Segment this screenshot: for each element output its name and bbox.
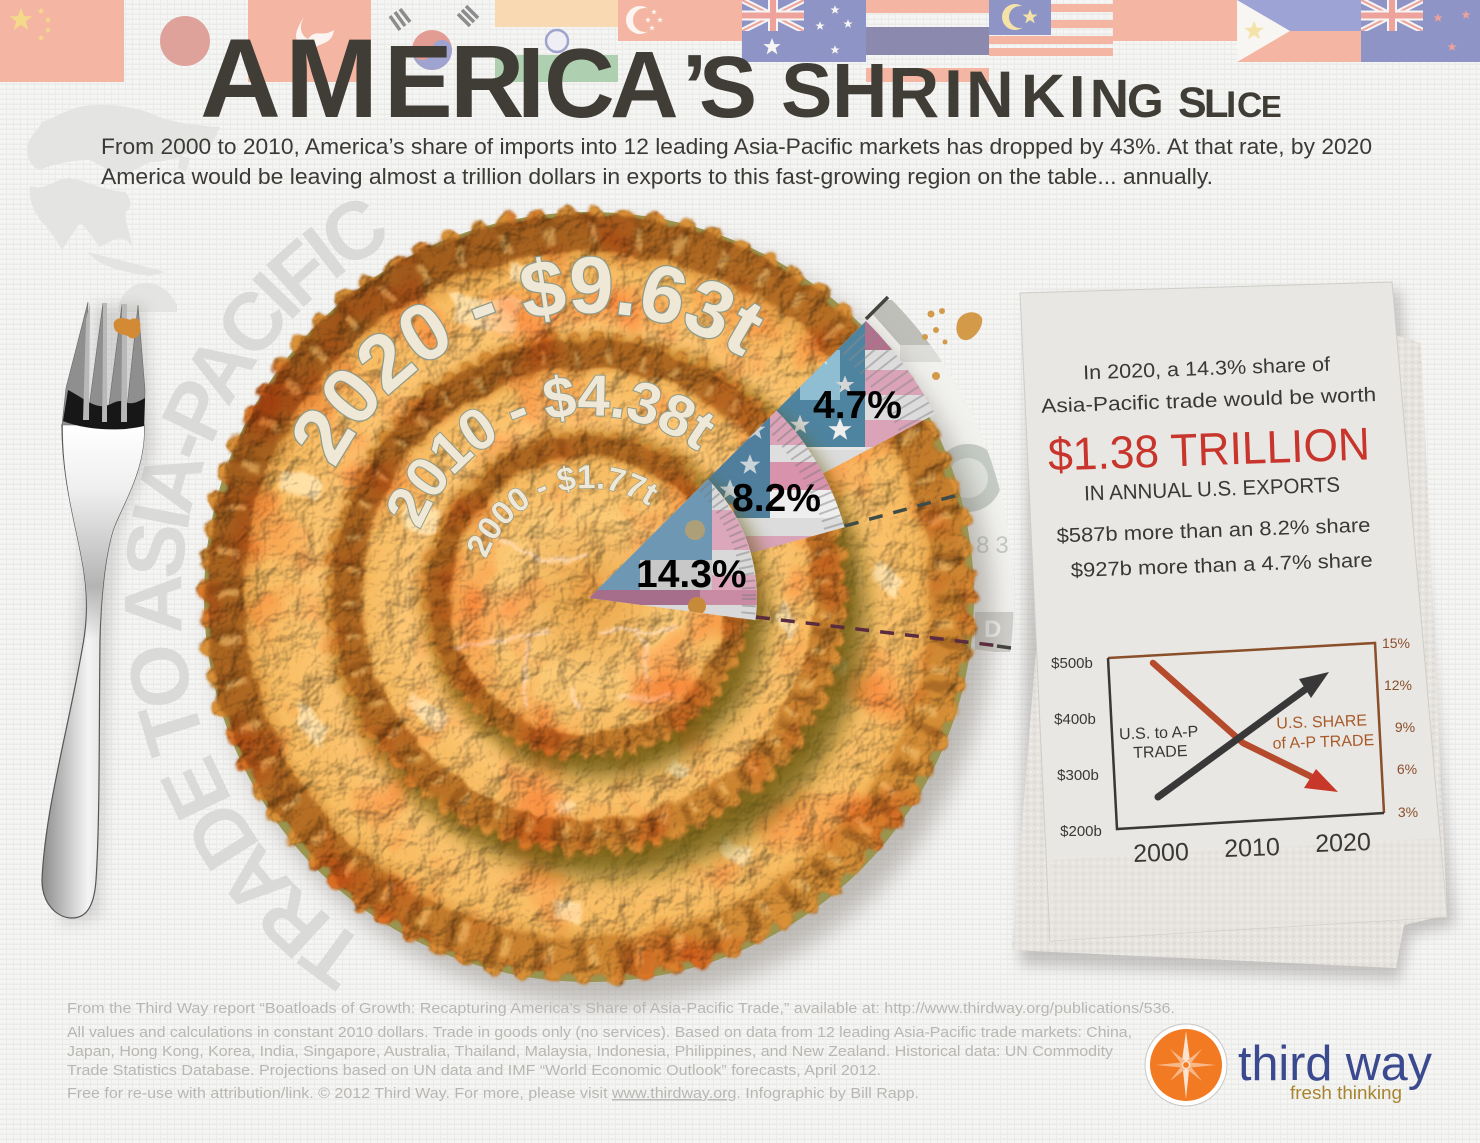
- year labels: 2000: [1133, 838, 1189, 868]
- left axis labels: $200b: [1060, 823, 1102, 840]
- right axis labels: 6%: [1397, 761, 1417, 777]
- logo wordmark: third way: [1238, 1037, 1432, 1091]
- title: A: [200, 16, 281, 141]
- left axis labels: $500b: [1051, 655, 1093, 672]
- flag: Philippines: [1237, 0, 1361, 62]
- pie tray edge: [204, 212, 974, 982]
- napkin: [1012, 282, 1455, 980]
- pie label: 2000: 2000 - $1.77t: [467, 464, 658, 559]
- pie label: 2010: 2010 - $4.38t: [387, 373, 716, 530]
- chart frame: [1108, 643, 1384, 829]
- pie tier shadow: 2010: [343, 354, 867, 878]
- flag: Australia: [742, 0, 866, 62]
- flag: New Zealand: [1361, 0, 1480, 62]
- fork: [42, 302, 155, 925]
- title: L: [1204, 82, 1228, 126]
- logo tagline: fresh thinking: [1290, 1083, 1402, 1103]
- right axis labels: [1382, 635, 1418, 820]
- flag: Malaysia: [989, 0, 1113, 56]
- napkin headline: Asia-Pacific trade would be worth: [1041, 384, 1377, 418]
- red share line: [1153, 663, 1338, 792]
- napkin embossed border: [1050, 838, 1447, 941]
- title: S: [781, 48, 832, 134]
- right axis labels: 9%: [1395, 719, 1415, 735]
- pie tier: 2000: [428, 435, 748, 755]
- title: K: [1021, 62, 1065, 130]
- footer source text: [67, 1000, 1175, 1102]
- line label: share: [1272, 712, 1375, 753]
- pie shadow: [216, 228, 992, 1004]
- footer source text: Japan, Hong Kong, Korea, India, Singapore, Australia, Thailand, Malaysia, Indonesia, Philippines, and New Zealand. Historical data: UN Commodity: [67, 1043, 1114, 1060]
- napkin headline: In 2020, a 14.3% share of: [1083, 354, 1331, 384]
- flag: Indonesia: [1113, 0, 1237, 41]
- title: I: [1226, 84, 1236, 125]
- napkin line chart: [1051, 635, 1418, 868]
- world map ghost: [27, 105, 220, 312]
- pie tier: 2010: [332, 339, 842, 849]
- flag foil slice: 4.7%: [774, 321, 934, 474]
- logo compass: [1145, 1024, 1227, 1106]
- napkin back layer: [1012, 335, 1447, 968]
- flag: Thailand: [866, 0, 989, 82]
- title: S: [699, 39, 757, 136]
- black trade line: [1158, 672, 1329, 797]
- pie tier shadow: 2000: [436, 446, 768, 778]
- title: M: [285, 16, 378, 141]
- title: R: [450, 24, 524, 139]
- dollar bill behind pie: [873, 300, 1014, 652]
- fork body: [42, 425, 144, 918]
- fork tine slots: [83, 303, 127, 422]
- pie tier: 2020: [207, 215, 967, 975]
- dollar bill behind pie: 83: [976, 532, 1015, 559]
- title: N: [966, 57, 1014, 131]
- title: I: [944, 56, 963, 132]
- napkin comparison lines: $587b more than an 8.2% share: [1056, 515, 1371, 547]
- footer source text: From the Third Way report “Boatloads of Growth: Recapturing America’s Share of Asia-Pacific Trade,” available at: http://www.thirdway.org/publications/536.: [67, 1000, 1175, 1017]
- left axis labels: $300b: [1057, 767, 1099, 784]
- title: H: [832, 48, 888, 134]
- flag: China: [0, 0, 124, 82]
- intro text: From 2000 to 2010, America’s share of imports into 12 leading Asia-Pacific markets has dropped by 43%. At that rate, by 2020: [101, 134, 1372, 159]
- left axis labels: [1051, 655, 1102, 840]
- line label: trade: U.S. to A-P: [1119, 724, 1199, 743]
- napkin comparison lines: [1056, 515, 1373, 582]
- napkin headline: [1040, 352, 1377, 418]
- title: ’: [682, 37, 707, 137]
- title: I: [517, 27, 545, 139]
- flag: Singapore: [618, 0, 742, 41]
- title: N: [1090, 69, 1129, 129]
- line label: share: of A-P TRADE: [1272, 732, 1375, 753]
- intro text: America would be leaving almost a trillion dollars in exports to this fast-growing region on the table... annually.: [101, 164, 1213, 189]
- title: E: [1261, 89, 1282, 124]
- right axis labels: 3%: [1398, 804, 1418, 820]
- slice label: 8.2%: 8.2%: [732, 477, 821, 520]
- napkin front layer: [1020, 282, 1447, 941]
- napkin comparison lines: $927b more than a 4.7% share: [1070, 549, 1373, 582]
- slice label: 4.7%: 4.7%: [813, 384, 902, 427]
- flag foil slice: 14.3%: [589, 479, 757, 620]
- title: E: [384, 24, 453, 139]
- flag: South Korea: [390, 6, 478, 74]
- flag: Japan: [160, 16, 210, 66]
- slice label: 14.3%: 14.3%: [636, 553, 747, 596]
- napkin big figure: $1.38 TRILLION: [1047, 417, 1371, 481]
- title: G: [1127, 74, 1164, 127]
- flag: India: [495, 0, 618, 82]
- title: C: [544, 28, 615, 138]
- title: A: [610, 32, 679, 138]
- footer source text: Trade Statistics Database. Projections based on UN data and IMF “World Economic Outlook” forecasts, April 2012.: [67, 1062, 881, 1079]
- fork reflection band: [63, 390, 145, 429]
- footer source text: All values and calculations in constant 2010 dollars. Trade in goods only (no services). Based on data from 12 leading Asia-Pacific trade markets: China,: [67, 1024, 1132, 1041]
- fork crumb: [114, 318, 140, 338]
- line label: share: U.S. SHARE: [1276, 712, 1367, 733]
- crumbs: [922, 308, 982, 380]
- line label: trade: TRADE: [1133, 743, 1188, 762]
- year labels: 2020: [1315, 828, 1371, 858]
- right axis labels: 15%: [1382, 635, 1410, 651]
- dollar bill behind pie: D: [984, 616, 1001, 643]
- flag: Hong Kong: [248, 0, 371, 82]
- title: R: [888, 54, 939, 133]
- left axis labels: $400b: [1054, 711, 1096, 728]
- title: C: [1237, 86, 1262, 125]
- arc label: trade to Asia-Pacific: TRADE TO ASIA-PACIFIC: [124, 200, 384, 992]
- footer source text: Free for re-use with attribution/link. © 2012 Third Way. For more, please visit www.thirdway.org . Infographic by Bill Rapp.: [67, 1085, 919, 1102]
- title: I: [1069, 64, 1085, 130]
- napkin subhead: IN ANNUAL U.S. EXPORTS: [1084, 474, 1340, 505]
- fork tines: [62, 302, 145, 425]
- right axis labels: 12%: [1384, 677, 1412, 693]
- fork shadow: [60, 305, 155, 925]
- year labels: 2010: [1224, 833, 1280, 863]
- title: S: [1178, 79, 1207, 127]
- slice guide lines: [756, 297, 1011, 648]
- flags row: [0, 0, 1480, 82]
- pie: [204, 212, 992, 1004]
- flag foil slice: 8.2%: [703, 410, 844, 552]
- line label: trade: [1119, 724, 1199, 762]
- napkin shadow: [1020, 290, 1455, 980]
- pie label: 2020: 2020 - $9.63t: [293, 256, 764, 468]
- logo: third way: [1145, 1024, 1432, 1106]
- fork upper head highlight: [63, 425, 144, 640]
- year labels: [1133, 828, 1371, 868]
